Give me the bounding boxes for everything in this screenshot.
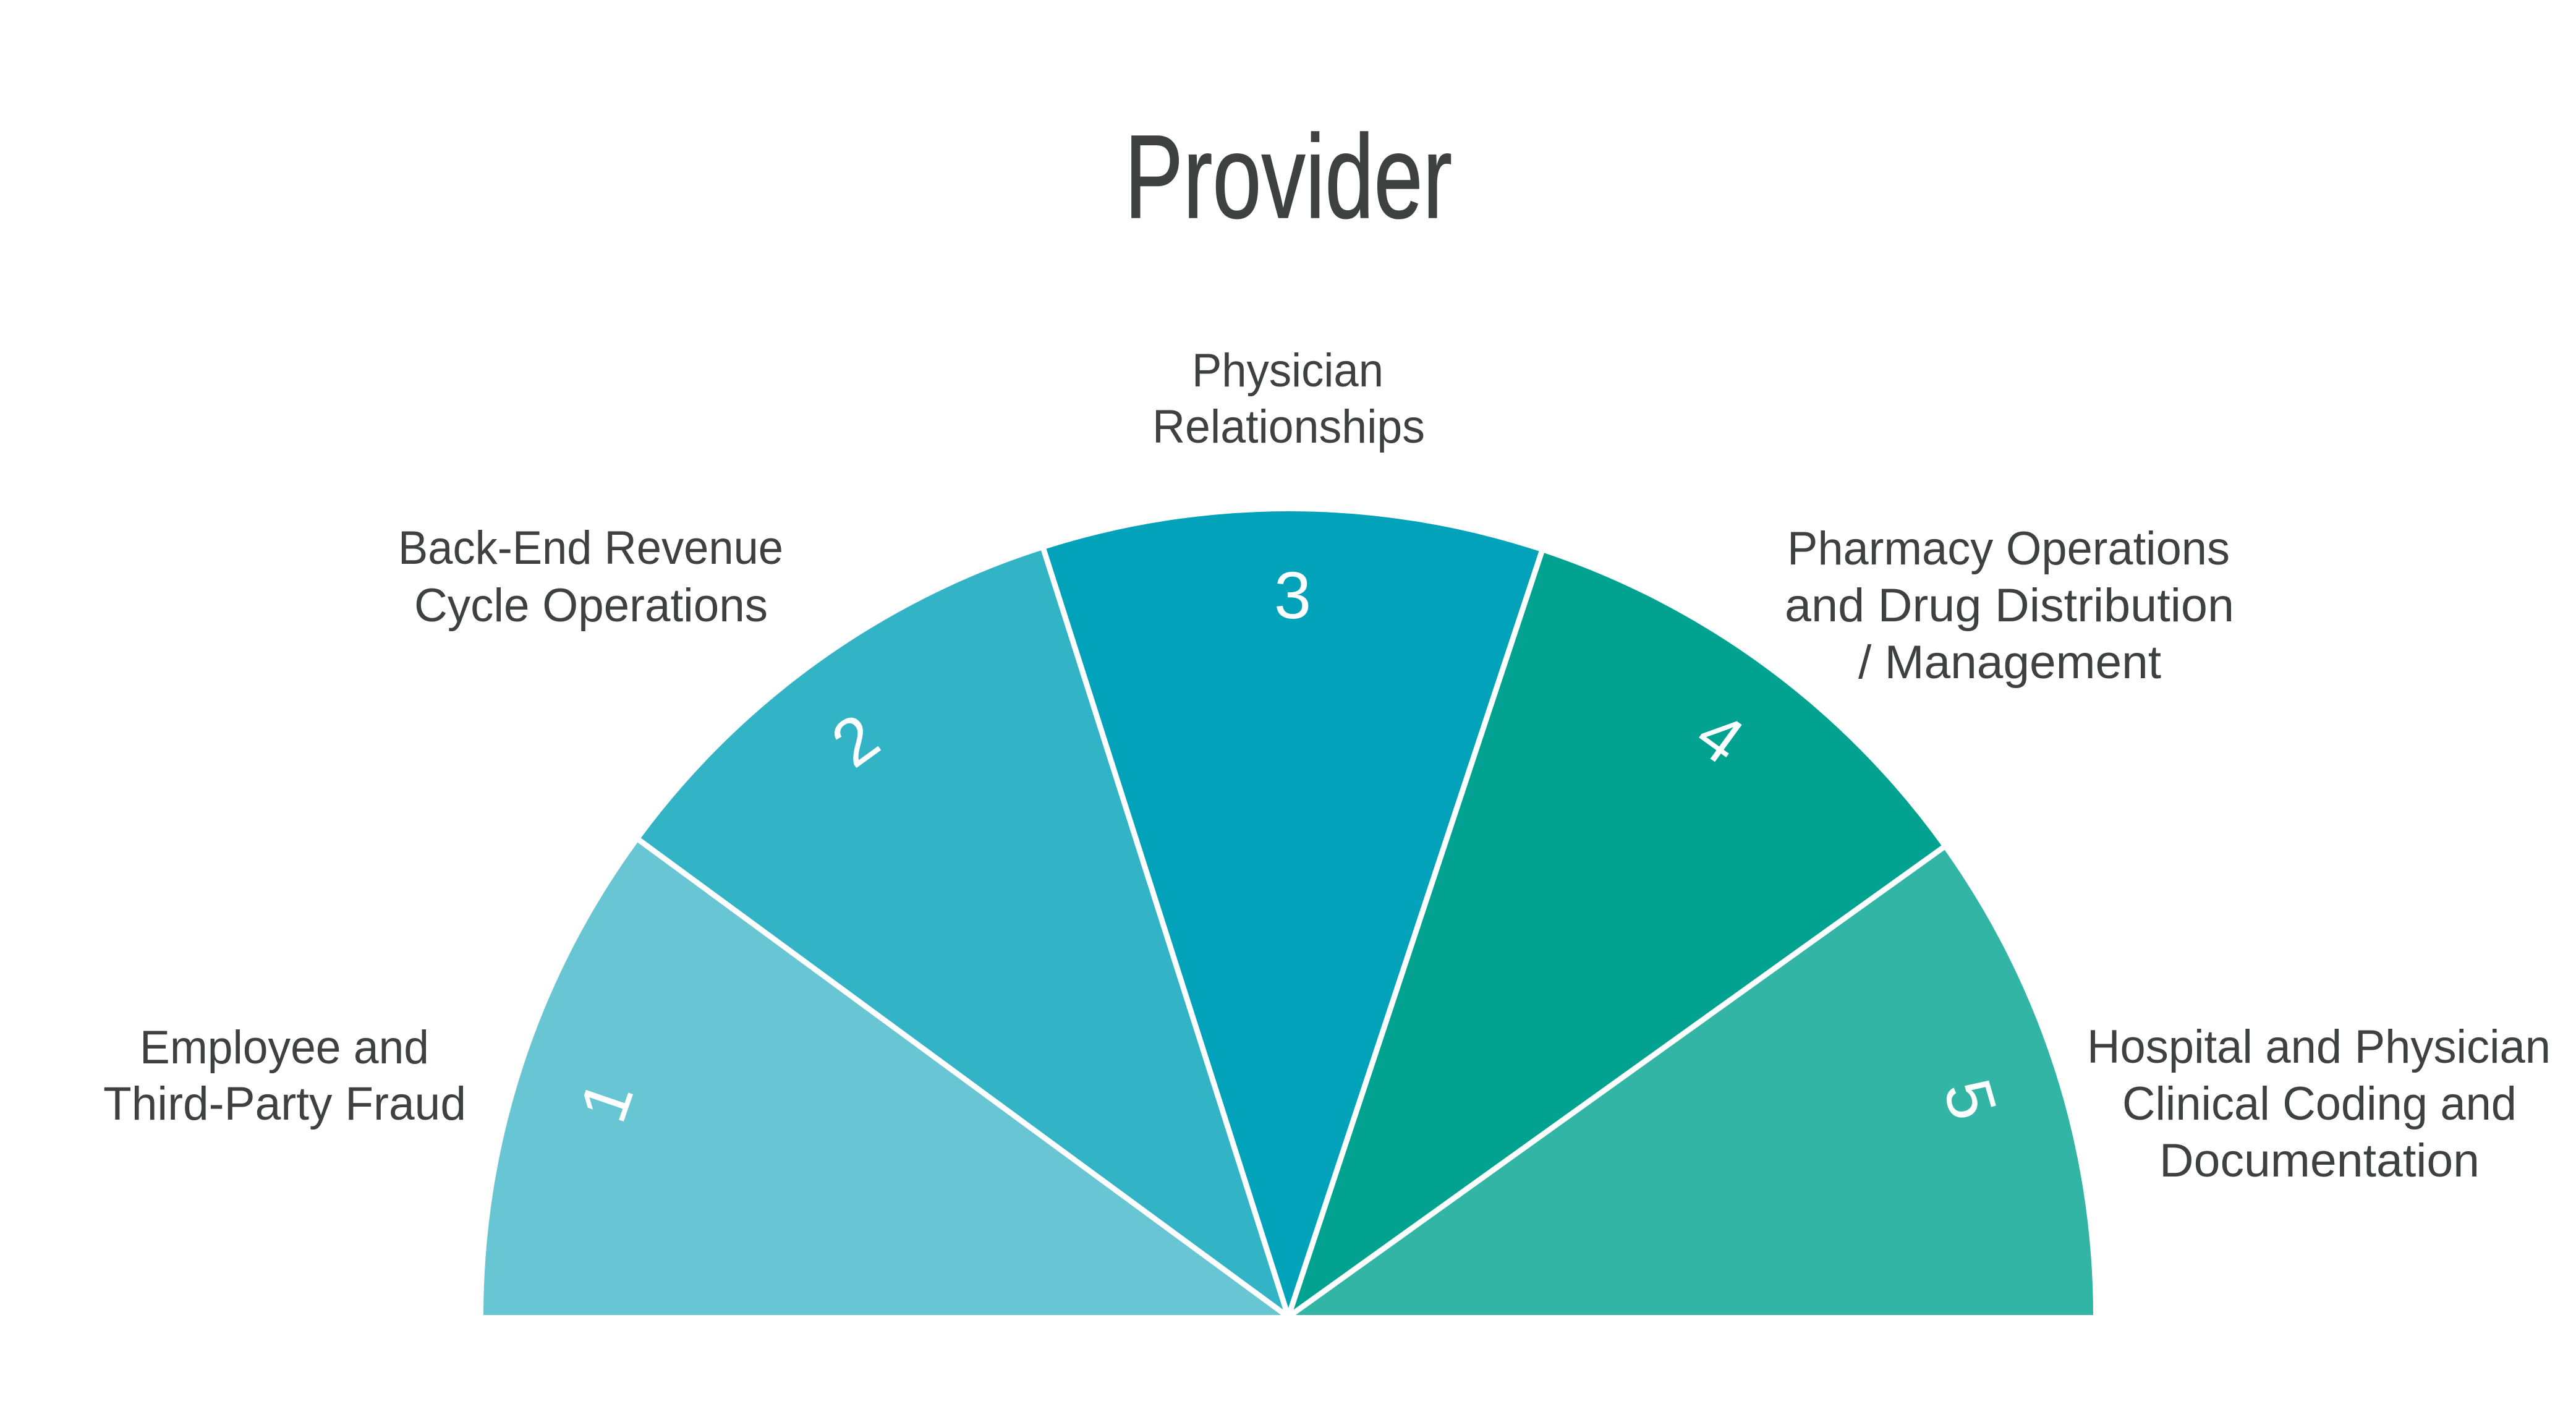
number 5: 5 — [1929, 1071, 2012, 1128]
segment 3 — [1044, 511, 1542, 1315]
label: back-end revenue cycle operations — [398, 522, 783, 632]
label: hospital and physician clinical coding and documentation: Hospital and Physician — [2087, 1021, 2551, 1073]
title: Provider — [1124, 110, 1452, 243]
number 1: 1 — [564, 1071, 647, 1131]
segment 4 — [1288, 552, 1943, 1315]
semicircle chart — [483, 511, 2093, 1317]
label: employee and third-party fraud — [103, 1021, 466, 1130]
label: employee and third-party fraud: Third-Party Fraud — [103, 1078, 466, 1130]
segment 2 — [639, 550, 1288, 1315]
number 4: 4 — [1683, 696, 1758, 778]
label: pharmacy operations and drug distribution / management: and Drug Distribution — [1785, 579, 2234, 632]
segment 1 — [483, 840, 1288, 1315]
label: physician relationships — [1152, 344, 1425, 453]
label: employee and third-party fraud: Employee and — [140, 1021, 429, 1074]
label: hospital and physician clinical coding and documentation: Documentation — [2159, 1134, 2480, 1187]
label: physician relationships: Relationships — [1152, 401, 1425, 453]
label: hospital and physician clinical coding and documentation — [2087, 1021, 2551, 1187]
label: pharmacy operations and drug distribution / management — [1785, 522, 2234, 689]
segment 5 — [1288, 848, 2093, 1315]
number 2: 2 — [818, 699, 892, 781]
label: pharmacy operations and drug distribution / management: Pharmacy Operations — [1787, 522, 2230, 575]
label: physician relationships: Physician — [1192, 344, 1384, 397]
label: hospital and physician clinical coding and documentation: Clinical Coding and — [2122, 1078, 2517, 1130]
label: pharmacy operations and drug distribution / management: / Management — [1858, 636, 2161, 689]
label: back-end revenue cycle operations: Cycle Operations — [414, 579, 768, 632]
label: back-end revenue cycle operations: Back-End Revenue — [398, 522, 783, 574]
number 3: 3 — [1274, 558, 1311, 632]
